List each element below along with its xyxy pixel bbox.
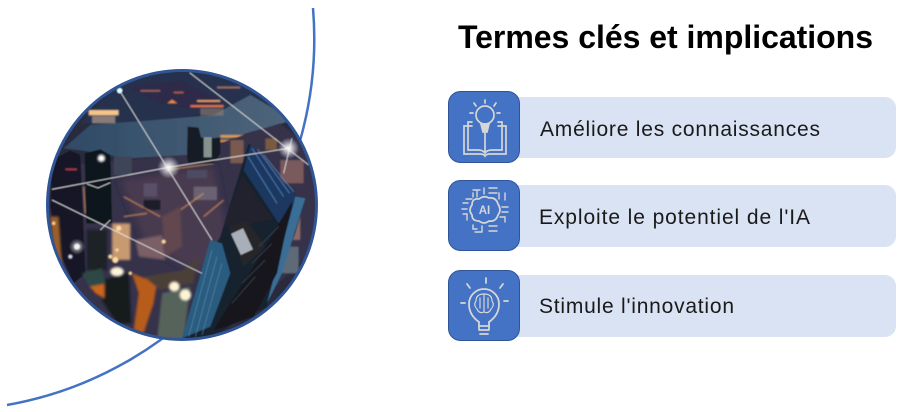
river	[64, 95, 294, 158]
icon: AI brain circuit: AI	[479, 205, 490, 217]
bar	[496, 97, 896, 158]
icon tile	[448, 270, 520, 340]
icon: book with light bulb	[464, 100, 506, 156]
circular city photo	[47, 70, 317, 340]
network lines	[52, 73, 309, 273]
central river towers	[187, 127, 220, 165]
label: Améliore les connaissances	[540, 118, 820, 141]
list item: connaissances	[448, 92, 896, 162]
small warm lights	[52, 222, 166, 275]
mid city mass	[47, 123, 317, 340]
title: Termes clés et implications	[458, 19, 873, 55]
list item: innovation	[448, 270, 896, 340]
glowing nodes	[157, 156, 180, 179]
street lights	[84, 163, 224, 217]
icon: bulb with brain	[461, 278, 508, 334]
far shore	[82, 72, 272, 124]
label: Exploite le potentiel de l'IA	[539, 206, 810, 229]
list item: potentiel IA	[448, 180, 896, 250]
decorative curved line	[7, 8, 314, 405]
icon tile	[448, 180, 520, 250]
bright lower-left buildings	[50, 207, 197, 340]
bar	[496, 185, 896, 247]
twin dome lights	[110, 267, 191, 301]
skyscraper	[182, 143, 305, 340]
icon: AI brain circuit	[462, 188, 508, 232]
left dark towers	[50, 151, 85, 283]
mid city blocks	[144, 138, 304, 273]
shore lights	[89, 87, 250, 142]
icon tile	[448, 92, 520, 162]
bar	[496, 275, 896, 337]
label: Stimule l'innovation	[539, 295, 734, 318]
